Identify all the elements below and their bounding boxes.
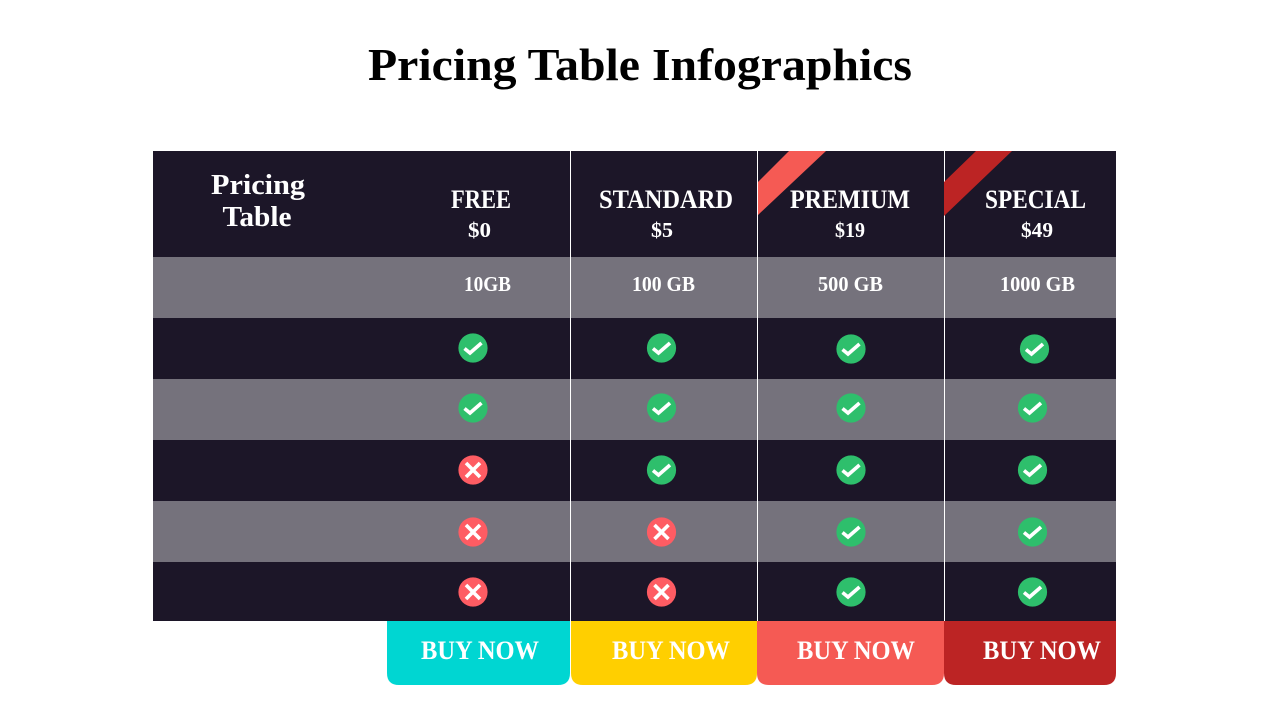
plan header: premium: $19: [835, 218, 865, 242]
plan header: free: $0: [468, 218, 491, 242]
feature icons: row 4: [458, 517, 1047, 547]
plan header: special: [985, 185, 1086, 242]
feature icons: row 1: [458, 333, 1049, 364]
plan header: standard: $5: [651, 218, 673, 242]
button: special: [944, 621, 1116, 685]
plan header: special: SPECIAL: [985, 185, 1086, 214]
storage row: [464, 272, 1075, 296]
button: free: BUY NOW: [421, 636, 539, 665]
title: Pricing Table Infographics: [368, 39, 912, 90]
plan header: standard: STANDARD: [599, 185, 733, 214]
plan header: special: $49: [1021, 218, 1053, 242]
button: standard: [571, 621, 757, 685]
plan header: premium: [790, 185, 910, 242]
storage row: 500 GB: [818, 272, 883, 296]
pricing table: [153, 151, 1116, 621]
storage row: 100 GB: [632, 272, 695, 296]
button: premium: BUY NOW: [797, 636, 915, 665]
plan header: free: FREE: [451, 185, 511, 214]
plan header: premium: PREMIUM: [790, 185, 910, 214]
storage row: 10GB: [464, 272, 511, 296]
table background rows: [153, 151, 1116, 621]
button: special: BUY NOW: [983, 636, 1101, 665]
button: standard: BUY NOW: [612, 636, 730, 665]
feature icons: row 3: [458, 455, 1047, 485]
ribbon: special: [944, 151, 1012, 216]
button: free: [387, 621, 570, 685]
feature icons: row 5: [458, 577, 1047, 607]
button: premium: [757, 621, 944, 685]
plan header: free: [451, 185, 511, 242]
heading: pricing table: Pricing: [211, 169, 306, 201]
storage row: 1000 GB: [1000, 272, 1075, 296]
heading: pricing table: [211, 169, 306, 233]
plan header: standard: [599, 185, 733, 242]
feature icons: row 2: [458, 393, 1047, 423]
ribbon: premium: [758, 151, 826, 215]
heading: pricing table: Table: [222, 201, 292, 233]
